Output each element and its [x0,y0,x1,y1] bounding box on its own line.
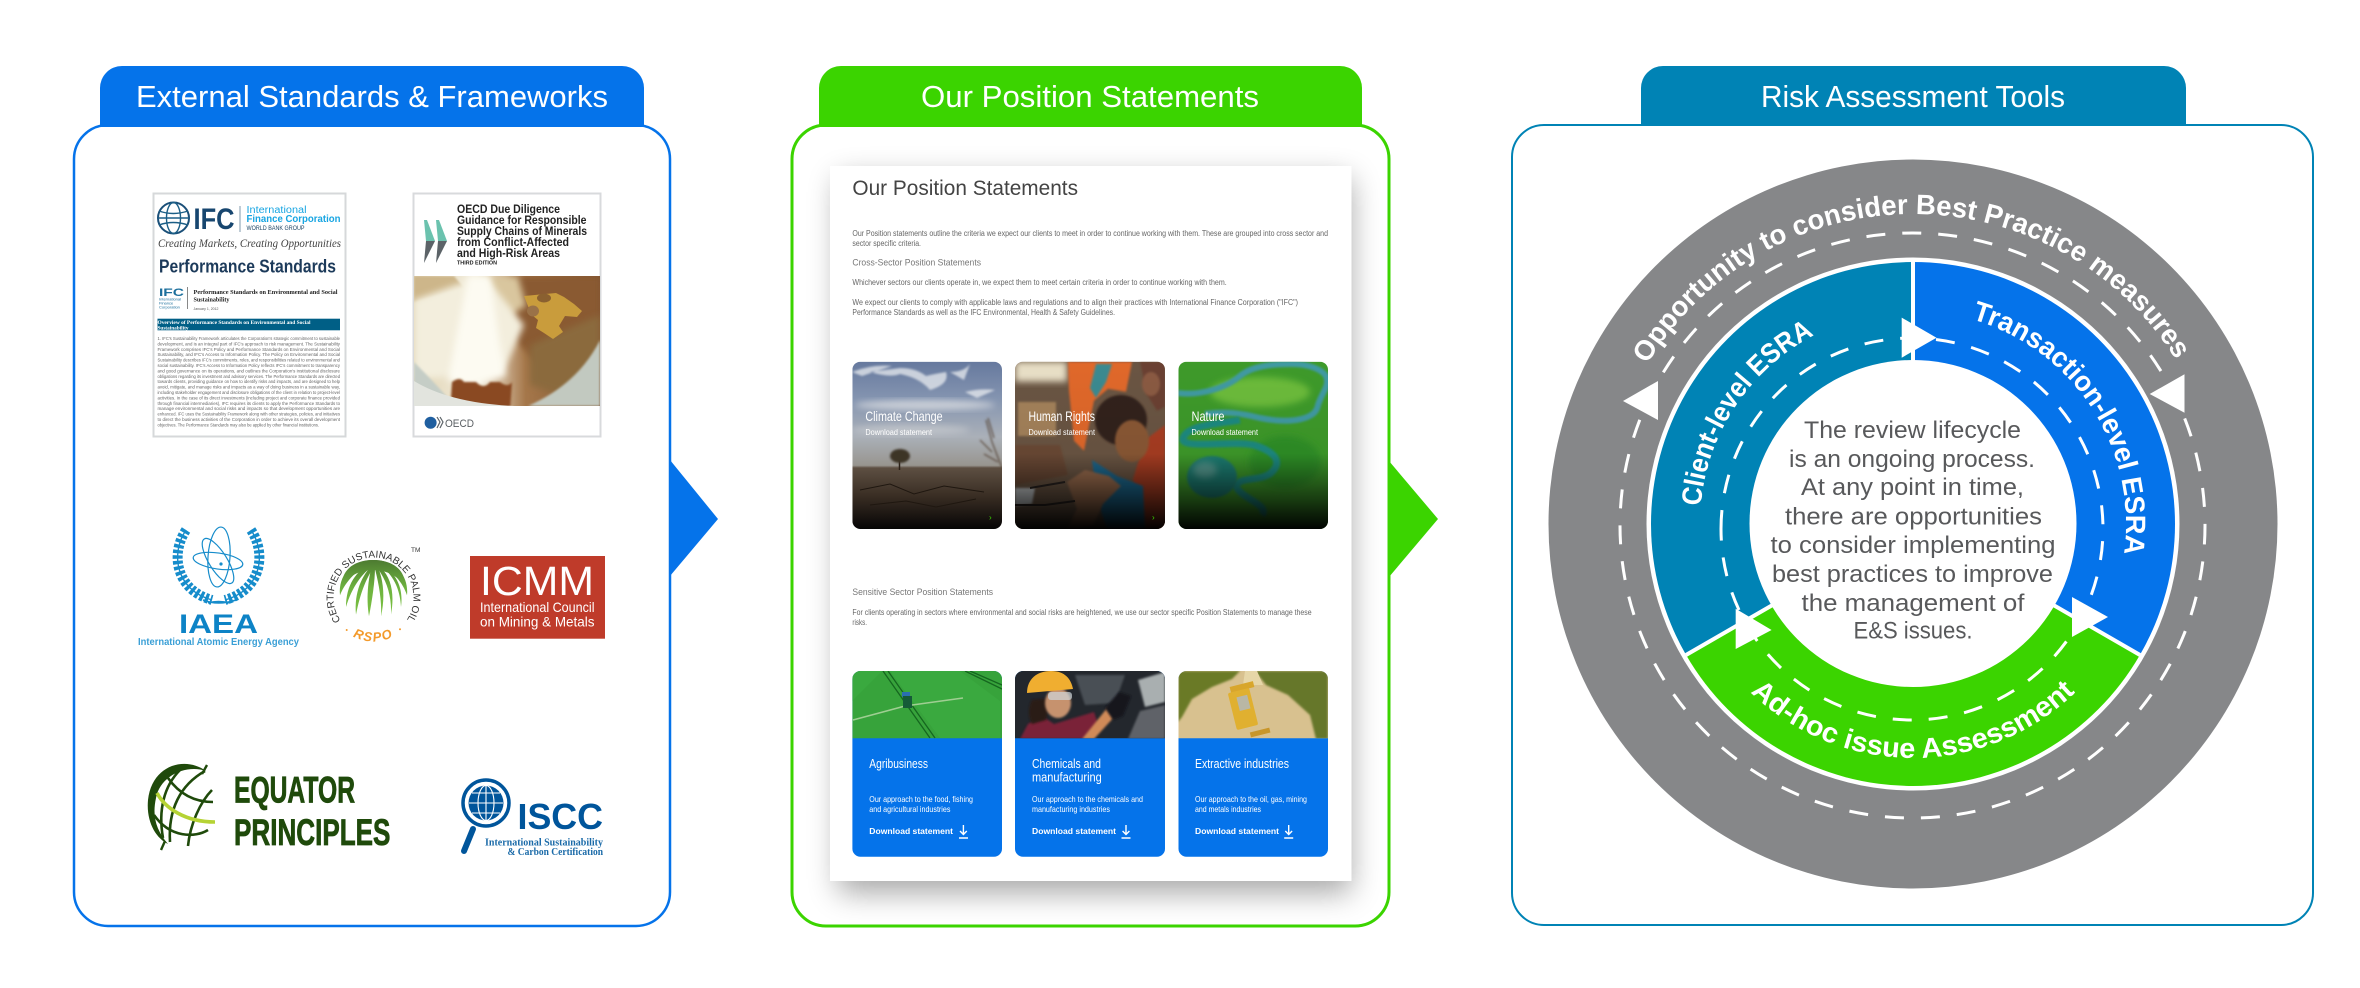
text block: centre explanation: there are opportunities [1785,504,2042,530]
document: IFC performance standards: Performance Standards [159,257,336,277]
card: extractive industries: Download statement [1195,826,1279,836]
card: climate change: Climate Change [865,408,943,424]
text block: IFC overview paragraph: avoid, mitigate, and manage risks and impacts as a way of doing business in a sustainable way, [158,385,340,391]
document: IFC performance standards: International [159,296,181,302]
card: human rights: Human Rights [1028,408,1095,424]
label: client-level ESRA: Client-level ESRA [1682,322,1814,504]
heading tab: risk assessment tools [1641,66,2186,126]
card: extractive industries: and metals industries [1195,804,1261,814]
document: OECD due diligence guidance cover [414,194,600,436]
heading tab: external standards [100,66,644,127]
ring: outer opportunity ring [1548,160,2278,888]
card: chemicals and manufacturing: manufacturing industries [1032,804,1110,814]
text block: IFC overview paragraph: obligations regarding its investment and advisory services. The Performance Standards are directed [158,374,340,380]
text block: IFC overview paragraph: activities. In the case of its direct investments (including project and corporate finance provided [158,395,340,401]
text block: centre explanation: best practices to improve [1772,561,2053,588]
document: IFC performance standards: IFC [194,203,234,236]
heading tab: risk assessment tools: Risk Assessment Tools [1761,79,2065,114]
sector: client-level ESRA [1651,262,1913,655]
logo: Equator Principles: PRINCIPLES [234,812,390,853]
card: agribusiness: Agribusiness [869,756,928,771]
text block: IFC overview paragraph: towards clients, providing guidance on how to identify risks and impacts, and are designed to help [158,379,340,385]
card: human rights: › [1152,513,1155,522]
text block: IFC overview paragraph: manage environmental and social risks and impacts so that development opportunities are [158,406,340,412]
text block: introduction: Our Position statements outline the criteria we expect our clients to meet in order to continue working with them. These are grouped into cross sector and [852,229,1328,238]
logo: ICMM [470,556,605,639]
document: IFC performance standards: Finance [159,300,174,306]
logo: IAEA [138,526,299,648]
document: OECD due diligence guidance cover: and High-Risk Areas [457,246,560,260]
panel: our position statements [792,66,1389,926]
card: extractive industries [1178,671,1328,857]
text block: IFC overview paragraph: to direct the business activities of the Corporation in order to achieve its overall development [158,417,341,423]
card: chemicals and manufacturing: Download statement [1032,826,1116,836]
card: agribusiness: Download statement [869,826,953,836]
icon: IFC globe [158,202,189,234]
text block: IFC overview paragraph [158,336,341,428]
document: IFC performance standards: Overview of Performance Standards on Environmental and Social [158,320,311,326]
icon: IAEA wreath and atom [178,526,259,603]
icon: palm fronds [340,560,407,616]
heading tab: our position statements [819,66,1362,127]
logo: Equator Principles: EQUATOR [234,770,355,811]
card: agribusiness [852,671,1002,857]
card: chemicals and manufacturing: manufacturing [1032,770,1102,785]
card: nature [1178,362,1328,529]
logo: RSPO certified sustainable palm oil: CERTIFIED SUSTAINABLE PALM OIL [326,550,420,622]
document: IFC performance standards: International [246,205,306,216]
logo: IAEA: International Atomic Energy Agency [138,636,299,648]
text block: centre explanation: to consider implementing [1770,532,2056,559]
text block: IFC overview paragraph: and good governance on its operations, and outlines the Corporation's institutional disclosure [158,368,340,374]
arrow: outer left [1623,381,1658,420]
logo: RSPO certified sustainable palm oil: TM [411,547,420,554]
card: climate change: › [989,513,992,522]
card: human rights [1015,362,1165,529]
text block: centre explanation: The review lifecycle [1804,417,2021,444]
icon: download [1122,825,1130,838]
text block: IFC overview paragraph: social sustainability. IFC's Access to Information Policy reflects IFC's commitment to transparency [158,363,341,369]
text block: sensitive sector intro: For clients operating in sectors where environmental and social risks are heightened, we use our sector specific Position Statements to manage these [852,608,1312,617]
text block: centre explanation [1750,360,2076,687]
webpage screenshot card: Our Position Statements [852,177,1078,200]
card: human rights: Download statement [1028,427,1095,437]
document: IFC performance standards: Corporation [159,304,180,310]
text block: introduction: Whichever sectors our clients operate in, we expect them to meet certain criteria in order to continue working with them. [852,278,1227,287]
text block: centre explanation: is an ongoing process. [1789,446,2035,473]
arrow: inner top [1902,318,1936,358]
icon: download [959,825,968,838]
text block: IFC overview paragraph: including stakeholder engagement and disclosure obligations of the client in relation to project-level [158,390,340,396]
text block: sensitive sector intro: Sensitive Sector Position Statements [852,587,993,598]
diagram: review lifecycle rings [1548,160,2278,888]
logo: ICMM: International Council [480,599,594,615]
logo: ICMM: ICMM [480,558,594,604]
document: IFC performance standards: Sustainability [158,326,189,332]
arrow: inner right [2072,597,2108,637]
webpage screenshot card [830,166,1352,881]
text block: sensitive sector intro: risks. [852,618,867,627]
label: opportunity to consider best practice measures: Opportunity to consider Best Practice measures [1634,194,2186,360]
document: OECD due diligence guidance cover: Supply Chains of Minerals [457,224,587,238]
card: chemicals and manufacturing: Our approach to the chemicals and [1032,794,1143,804]
text block: introduction: sector specific criteria. [852,239,921,248]
card: extractive industries: Extractive industries [1195,756,1289,771]
icon: OECD chevrons [424,220,447,263]
logo: OECD [425,417,474,430]
text block: centre explanation: At any point in time, [1801,474,2024,501]
document: OECD due diligence guidance cover: THIRD EDITION [457,261,497,267]
arrow: position statements to risk tools [1389,461,1438,577]
sector: ad-hoc issue assessment [1686,524,2140,786]
text block: introduction [852,229,1328,317]
label: ad-hoc issue assessment: Ad-hoc issue Assessment [1750,681,2075,758]
document: OECD due diligence guidance cover: from Conflict-Affected [457,235,569,249]
document: OECD due diligence guidance cover: OECD Due Diligence [457,202,560,216]
document: IFC performance standards: Sustainability [194,297,230,304]
card: climate change [850,362,1002,529]
heading tab: external standards: External Standards & Frameworks [136,79,608,114]
icon: magnifier globe [463,780,509,851]
text block: IFC overview paragraph: Sustainability describes IFC's commitments, roles, and responsibilities related to environmental and [158,358,340,364]
text block: sensitive sector intro [852,587,1312,627]
heading tab: our position statements: Our Position Statements [921,79,1259,114]
logo: ISCC [463,780,604,858]
text block: IFC overview paragraph: enhanced. IFC uses the Sustainability Framework along with other strategies, policies, and initiatives [158,412,341,418]
logo: RSPO certified sustainable palm oil: RSPO [353,629,392,642]
document: IFC performance standards: Performance Standards on Environmental and Social [194,289,338,296]
sector: transaction-level ESRA [1913,262,2175,655]
document: IFC performance standards: Creating Markets, Creating Opportunities [158,236,341,250]
text block: centre explanation: the management of [1802,590,2025,617]
logo: ISCC: ISCC [518,796,603,837]
text block: IFC overview paragraph: objectives. The Performance Standards may also be applied by other financial institutions. [158,422,319,428]
card: climate change: Download statement [865,427,932,437]
text block: IFC overview paragraph: 1. IFC's Sustainability Framework articulates the Corporation's strategic commitment to sustainable [158,336,340,342]
card: chemicals and manufacturing: Chemicals and [1032,756,1101,771]
logo: Equator Principles [148,764,390,853]
panel: external standards and frameworks [72,66,672,928]
document: IFC performance standards: IFC [159,287,184,299]
icon: download [1284,825,1293,838]
logo: IAEA: IAEA [179,609,258,639]
document: IFC performance standards: January 1, 2012 [194,306,219,311]
arrow: outer right [2150,374,2184,413]
card: extractive industries: Our approach to the oil, gas, mining [1195,794,1307,804]
logo: OECD: OECD [445,418,474,430]
card: agribusiness: and agricultural industries [869,804,950,814]
document: OECD due diligence guidance cover: Guidance for Responsible [457,213,587,227]
icon: Equator globe [148,764,215,850]
logo: ICMM: on Mining & Metals [480,614,594,630]
document: IFC performance standards: Finance Corporation [246,214,340,225]
image: puzzle piece cover photo [414,275,600,412]
text block: IFC overview paragraph: Sustainability, and IFC's Access to Information Policy. The Policy on Environmental and Social [158,352,340,358]
text block: introduction: Performance Standards as well as the IFC Environmental, Health & Safety Guidelines. [852,308,1115,317]
text block: introduction: Cross-Sector Position Statements [852,258,981,269]
text block: centre explanation: E&S issues. [1854,618,1972,644]
text block: IFC overview paragraph: Framework comprises IFC's Policy and Performance Standards on Environmental and Social [158,347,340,353]
card: agribusiness: Our approach to the food, fishing [869,794,973,804]
label: transaction-level ESRA: Transaction-level ESRA [1976,300,2146,554]
logo: ISCC: & Carbon Certification [508,847,603,858]
arrow: inner left [1736,609,1772,649]
card: chemicals and manufacturing [1015,671,1165,857]
logo: ISCC: International Sustainability [485,838,604,849]
panel: risk assessment tools [1511,66,2314,926]
text block: IFC overview paragraph: development, and is an integral part of IFC's approach to risk management. The Sustainability [158,341,341,347]
card: nature: Download statement [1192,427,1258,437]
arrow: standards to position statements [670,460,718,576]
card: nature: Nature [1192,408,1225,424]
text block: IFC overview paragraph: through financial intermediaries), IFC requires its clients to apply the Performance Standards to [158,401,340,407]
text block: introduction: We expect our clients to comply with applicable laws and regulations and to align their practices with International Finance Corporation ("IFC") [852,298,1298,307]
document: IFC performance standards [154,194,346,436]
document: IFC performance standards: WORLD BANK GROUP [246,225,304,232]
